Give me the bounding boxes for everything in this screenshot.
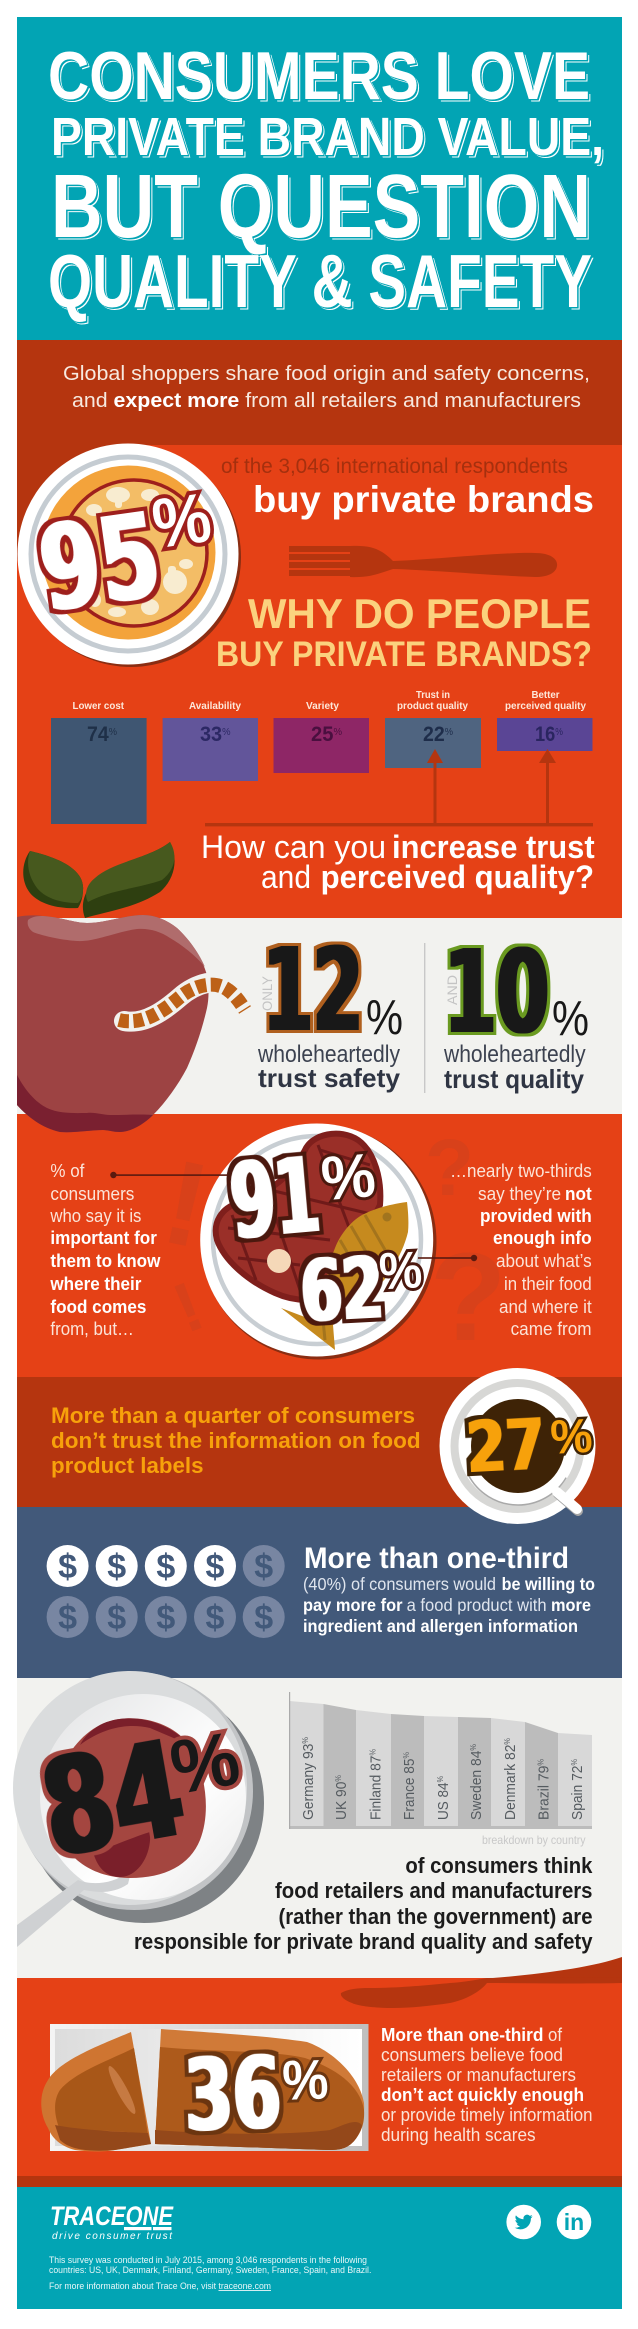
chart: breakdown by country [289, 1692, 592, 1847]
respondents text: of the 3,046 international respondents [221, 455, 568, 478]
country labels: % [368, 1749, 378, 1756]
plate with steak and fish [110, 1124, 477, 1360]
icon: worm [119, 983, 245, 1022]
84% figure: 84 [31, 1711, 194, 1888]
text: consumers think [134, 1853, 593, 1954]
dollar coins: $ [58, 1548, 77, 1586]
handle [558, 1494, 578, 1511]
apple with worm [17, 915, 245, 1132]
dollar coins: $ [107, 1599, 126, 1637]
panel: responsibility [13, 1671, 622, 1979]
text: wholeheartedly trust safety: trust safety [258, 1063, 401, 1093]
84% figure: % [164, 1716, 246, 1811]
text: right column: came from [511, 1318, 592, 1339]
country labels: % [436, 1776, 445, 1782]
bar: lower cost 74%: Lower cost [72, 701, 125, 712]
text: act quickly: of [548, 2024, 563, 2045]
country labels: Spain 72 [569, 1761, 586, 1820]
country labels: US 84 [435, 1778, 452, 1820]
panel: intro band [17, 340, 622, 445]
country labels: Germany 93 [300, 1737, 317, 1820]
text: left column: important for [50, 1227, 157, 1248]
text: left column: food comes [50, 1296, 146, 1317]
bar chart: reasons [51, 690, 592, 824]
text: right column: enough info [493, 1227, 592, 1248]
text: left column: from, but… [50, 1318, 134, 1339]
text: act quickly: or provide timely information [381, 2104, 592, 2125]
36% figure: % [281, 2047, 329, 2112]
buy private brands: buy private brands [253, 479, 594, 520]
survey note: For more information about Trace One, visit traceone.com [49, 2281, 271, 2291]
text: right column: in their food [504, 1273, 592, 1294]
bar: variety 25% [274, 701, 369, 773]
62% figure: % [378, 1241, 424, 1301]
bar: trust in product quality 22%: 22 [423, 723, 446, 746]
bar: trust in product quality 22%: Trust in [416, 690, 450, 701]
text: wholeheartedly trust quality: trust quality [444, 1064, 585, 1094]
text: act quickly: don’t act quickly enough [381, 2084, 584, 2105]
country labels: UK 90 [333, 1778, 350, 1820]
survey note: This survey was conducted in July 2015, among 3,046 respondents in the following [49, 2255, 367, 2265]
country labels: % [503, 1738, 512, 1745]
heading: more than one-third: More than one-third [304, 1542, 569, 1575]
text: right column: …nearly two-thirds [450, 1160, 592, 1181]
chart caption: breakdown by country [482, 1833, 586, 1847]
how can you increase trust: perceived quality? [321, 859, 594, 895]
bar: variety 25%: % [333, 727, 342, 738]
bar: variety 25%: Variety [306, 701, 339, 712]
icon: linkedin: in [564, 2209, 584, 2235]
text: wholeheartedly trust safety [257, 1041, 401, 1093]
bar: better perceived quality 16%: perceived quality [505, 701, 586, 712]
text: wholeheartedly trust safety: wholeheartedly [257, 1041, 400, 1068]
country labels: % [402, 1752, 411, 1758]
91% figure: 91 [226, 1134, 324, 1263]
heading: why do people: BUY PRIVATE BRANDS? [216, 635, 592, 674]
dollar coins: $ [107, 1548, 126, 1586]
country labels: % [570, 1759, 579, 1766]
country labels: % [469, 1744, 478, 1751]
country labels [300, 1737, 586, 1820]
text: right column: about what’s [496, 1250, 592, 1271]
dollar coins: $ [206, 1599, 225, 1637]
panel: why people buy private brands [17, 444, 622, 918]
text: more than a quarter: More than a quarter of consumers [51, 1403, 415, 1428]
bar: availability 33% [163, 701, 258, 781]
text: right column [450, 1160, 592, 1339]
text: consumers think: of consumers think [405, 1853, 593, 1878]
stat: 12%: 12 [263, 924, 363, 1058]
sauce blob [53, 1718, 206, 1878]
text: willing to pay more: more [551, 1595, 591, 1615]
bar: lower cost 74%: 74 [87, 723, 110, 746]
95% figure: % [148, 478, 216, 563]
survey note [49, 2255, 371, 2291]
text: willing to pay more [303, 1574, 595, 1636]
bar: lower cost 74% [51, 701, 147, 824]
steak [216, 1134, 380, 1300]
faint question and exclamation marks: ? [425, 1123, 474, 1212]
intro text: Global shoppers share food origin and safety concerns, [63, 363, 590, 385]
stat: 10%: % [552, 992, 589, 1046]
text: act quickly [381, 2024, 592, 2145]
text: left column: who say it is [49, 1205, 141, 1226]
panel: footer [17, 2187, 622, 2309]
27% figure: 27 [465, 1403, 547, 1489]
faint question and exclamation marks: ! [163, 1267, 214, 1348]
icon: leaves [23, 842, 175, 918]
country labels: % [301, 1737, 310, 1744]
survey note: countries: US, UK, Denmark, Finland, Germany, Sweden, France, Spain, and Brazil. [49, 2265, 371, 2275]
text: consumers think: responsible for private brand quality and safety [134, 1929, 593, 1954]
text: consumers think: (rather than the government) are [278, 1904, 592, 1929]
faint question and exclamation marks [153, 1123, 506, 1367]
intro text: and expect more from all retailers and manufacturers [72, 390, 581, 412]
magnifying glass with 27% [440, 1368, 596, 1524]
dollar coins [47, 1545, 285, 1638]
country labels: Sweden 84 [468, 1745, 485, 1820]
heading: why do people [216, 590, 592, 674]
country labels: Denmark 82 [502, 1738, 519, 1820]
how can you increase trust: increase trust [392, 829, 595, 865]
logo: trace one: TRACEONE [50, 2201, 174, 2231]
text: willing to pay more: (40%) of consumers would [303, 1574, 496, 1594]
bar: availability 33%: 33 [200, 723, 223, 746]
heading: why do people: WHY DO PEOPLE [248, 590, 591, 637]
icon: linkedin [557, 2205, 591, 2239]
icon: fork [289, 546, 557, 577]
text: left column: them to know [50, 1250, 161, 1271]
text: right column: and where it [499, 1296, 592, 1317]
dollar coins: $ [58, 1599, 77, 1637]
27% figure: % [549, 1410, 594, 1465]
text: left column: % of [50, 1160, 85, 1181]
icon: twitter [506, 2205, 541, 2239]
text: right column: provided with [480, 1205, 592, 1226]
panel: pay more [17, 1507, 622, 1678]
stat: 12%: % [366, 991, 403, 1045]
how can you increase trust: How can you [201, 829, 386, 865]
text: consumers think: food retailers and manufacturers [275, 1878, 592, 1903]
bar: better perceived quality 16%: 16 [535, 723, 558, 746]
text: right column: not [565, 1183, 592, 1204]
panel: bread [17, 1977, 622, 2187]
36% figure: 36 [183, 2034, 283, 2154]
steak bone [267, 1249, 291, 1273]
bar: better perceived quality 16%: % [555, 727, 563, 738]
pizza plate with 95% [18, 444, 241, 667]
how can you increase trust [201, 829, 595, 895]
plate with spoon and 84% [13, 1671, 264, 1947]
label: and: AND [444, 975, 460, 1005]
mushrooms [86, 487, 193, 617]
text: more than a quarter [51, 1403, 421, 1478]
bar: better perceived quality 16% [497, 690, 592, 751]
bar: lower cost 74%: % [109, 727, 117, 738]
connector lines [110, 1172, 477, 1261]
stat: 10%: 10 [444, 926, 549, 1060]
text: willing to pay more: ingredient and allergen information [303, 1616, 578, 1636]
text: right column: say they’re [478, 1183, 561, 1204]
icon: knife [341, 1977, 622, 2008]
bar: trust in product quality 22%: % [445, 727, 453, 738]
dollar coins: $ [254, 1599, 273, 1637]
faint question and exclamation marks: ! [153, 1134, 220, 1274]
fish [281, 1202, 408, 1350]
91% figure: % [318, 1141, 378, 1214]
grill marks [228, 1145, 375, 1290]
arrows to bars [205, 749, 593, 826]
country labels: % [334, 1775, 343, 1782]
text: left column: consumers [50, 1183, 134, 1204]
title heading [48, 38, 604, 323]
knife blade above fold [480, 1957, 622, 1979]
faint question and exclamation marks: ? [430, 1228, 506, 1367]
country labels: France 85 [401, 1752, 418, 1820]
bar: trust in product quality 22% [385, 690, 481, 768]
dollar coins: $ [156, 1599, 175, 1637]
dollar coins: $ [254, 1548, 273, 1586]
country labels: % [536, 1759, 546, 1766]
text: willing to pay more: a food product with [407, 1595, 547, 1615]
country labels: Finland 87 [368, 1750, 384, 1820]
panel: trust safety and quality [17, 918, 622, 1114]
panel: title [17, 17, 622, 340]
text: more than a quarter: don’t trust the information on food [51, 1428, 421, 1453]
spoon handle [17, 1868, 132, 1947]
bread right slice [155, 2029, 364, 2150]
text: willing to pay more: pay more for [303, 1595, 403, 1615]
95% figure: 95 [32, 486, 168, 639]
panel: food origin [17, 1114, 622, 1377]
bar: variety 25%: 25 [311, 723, 334, 746]
bread left slice [41, 2032, 151, 2152]
text: willing to pay more: be willing to [502, 1574, 595, 1594]
62% figure: 62 [298, 1238, 386, 1342]
text: left column [49, 1160, 161, 1339]
label: only: ONLY [259, 975, 275, 1011]
text: wholeheartedly trust quality: wholeheartedly [443, 1041, 586, 1068]
text: left column: where their [49, 1273, 141, 1294]
dollar coins: $ [206, 1548, 225, 1586]
text: act quickly: during health scares [381, 2124, 536, 2145]
text: act quickly: consumers believe food [381, 2044, 563, 2065]
panel: food labels [17, 1377, 622, 1507]
bread image [41, 2024, 368, 2154]
country labels: Brazil 79 [536, 1762, 552, 1820]
intro text [63, 363, 590, 412]
how can you increase trust: and [261, 859, 311, 895]
text: act quickly: More than one-third [381, 2024, 543, 2045]
bar: availability 33%: % [222, 727, 231, 738]
bar: availability 33%: Availability [189, 701, 241, 712]
logo: trace one: drive consumer trust [52, 2231, 173, 2242]
bar: trust in product quality 22%: product quality [397, 701, 468, 712]
text: act quickly: retailers or manufacturers [381, 2064, 576, 2085]
text: wholeheartedly trust quality [443, 1041, 586, 1094]
bar: better perceived quality 16%: Better [532, 690, 560, 701]
logo: trace one [50, 2201, 174, 2242]
text: more than a quarter: product labels [51, 1453, 204, 1478]
dollar coins: $ [156, 1548, 175, 1586]
